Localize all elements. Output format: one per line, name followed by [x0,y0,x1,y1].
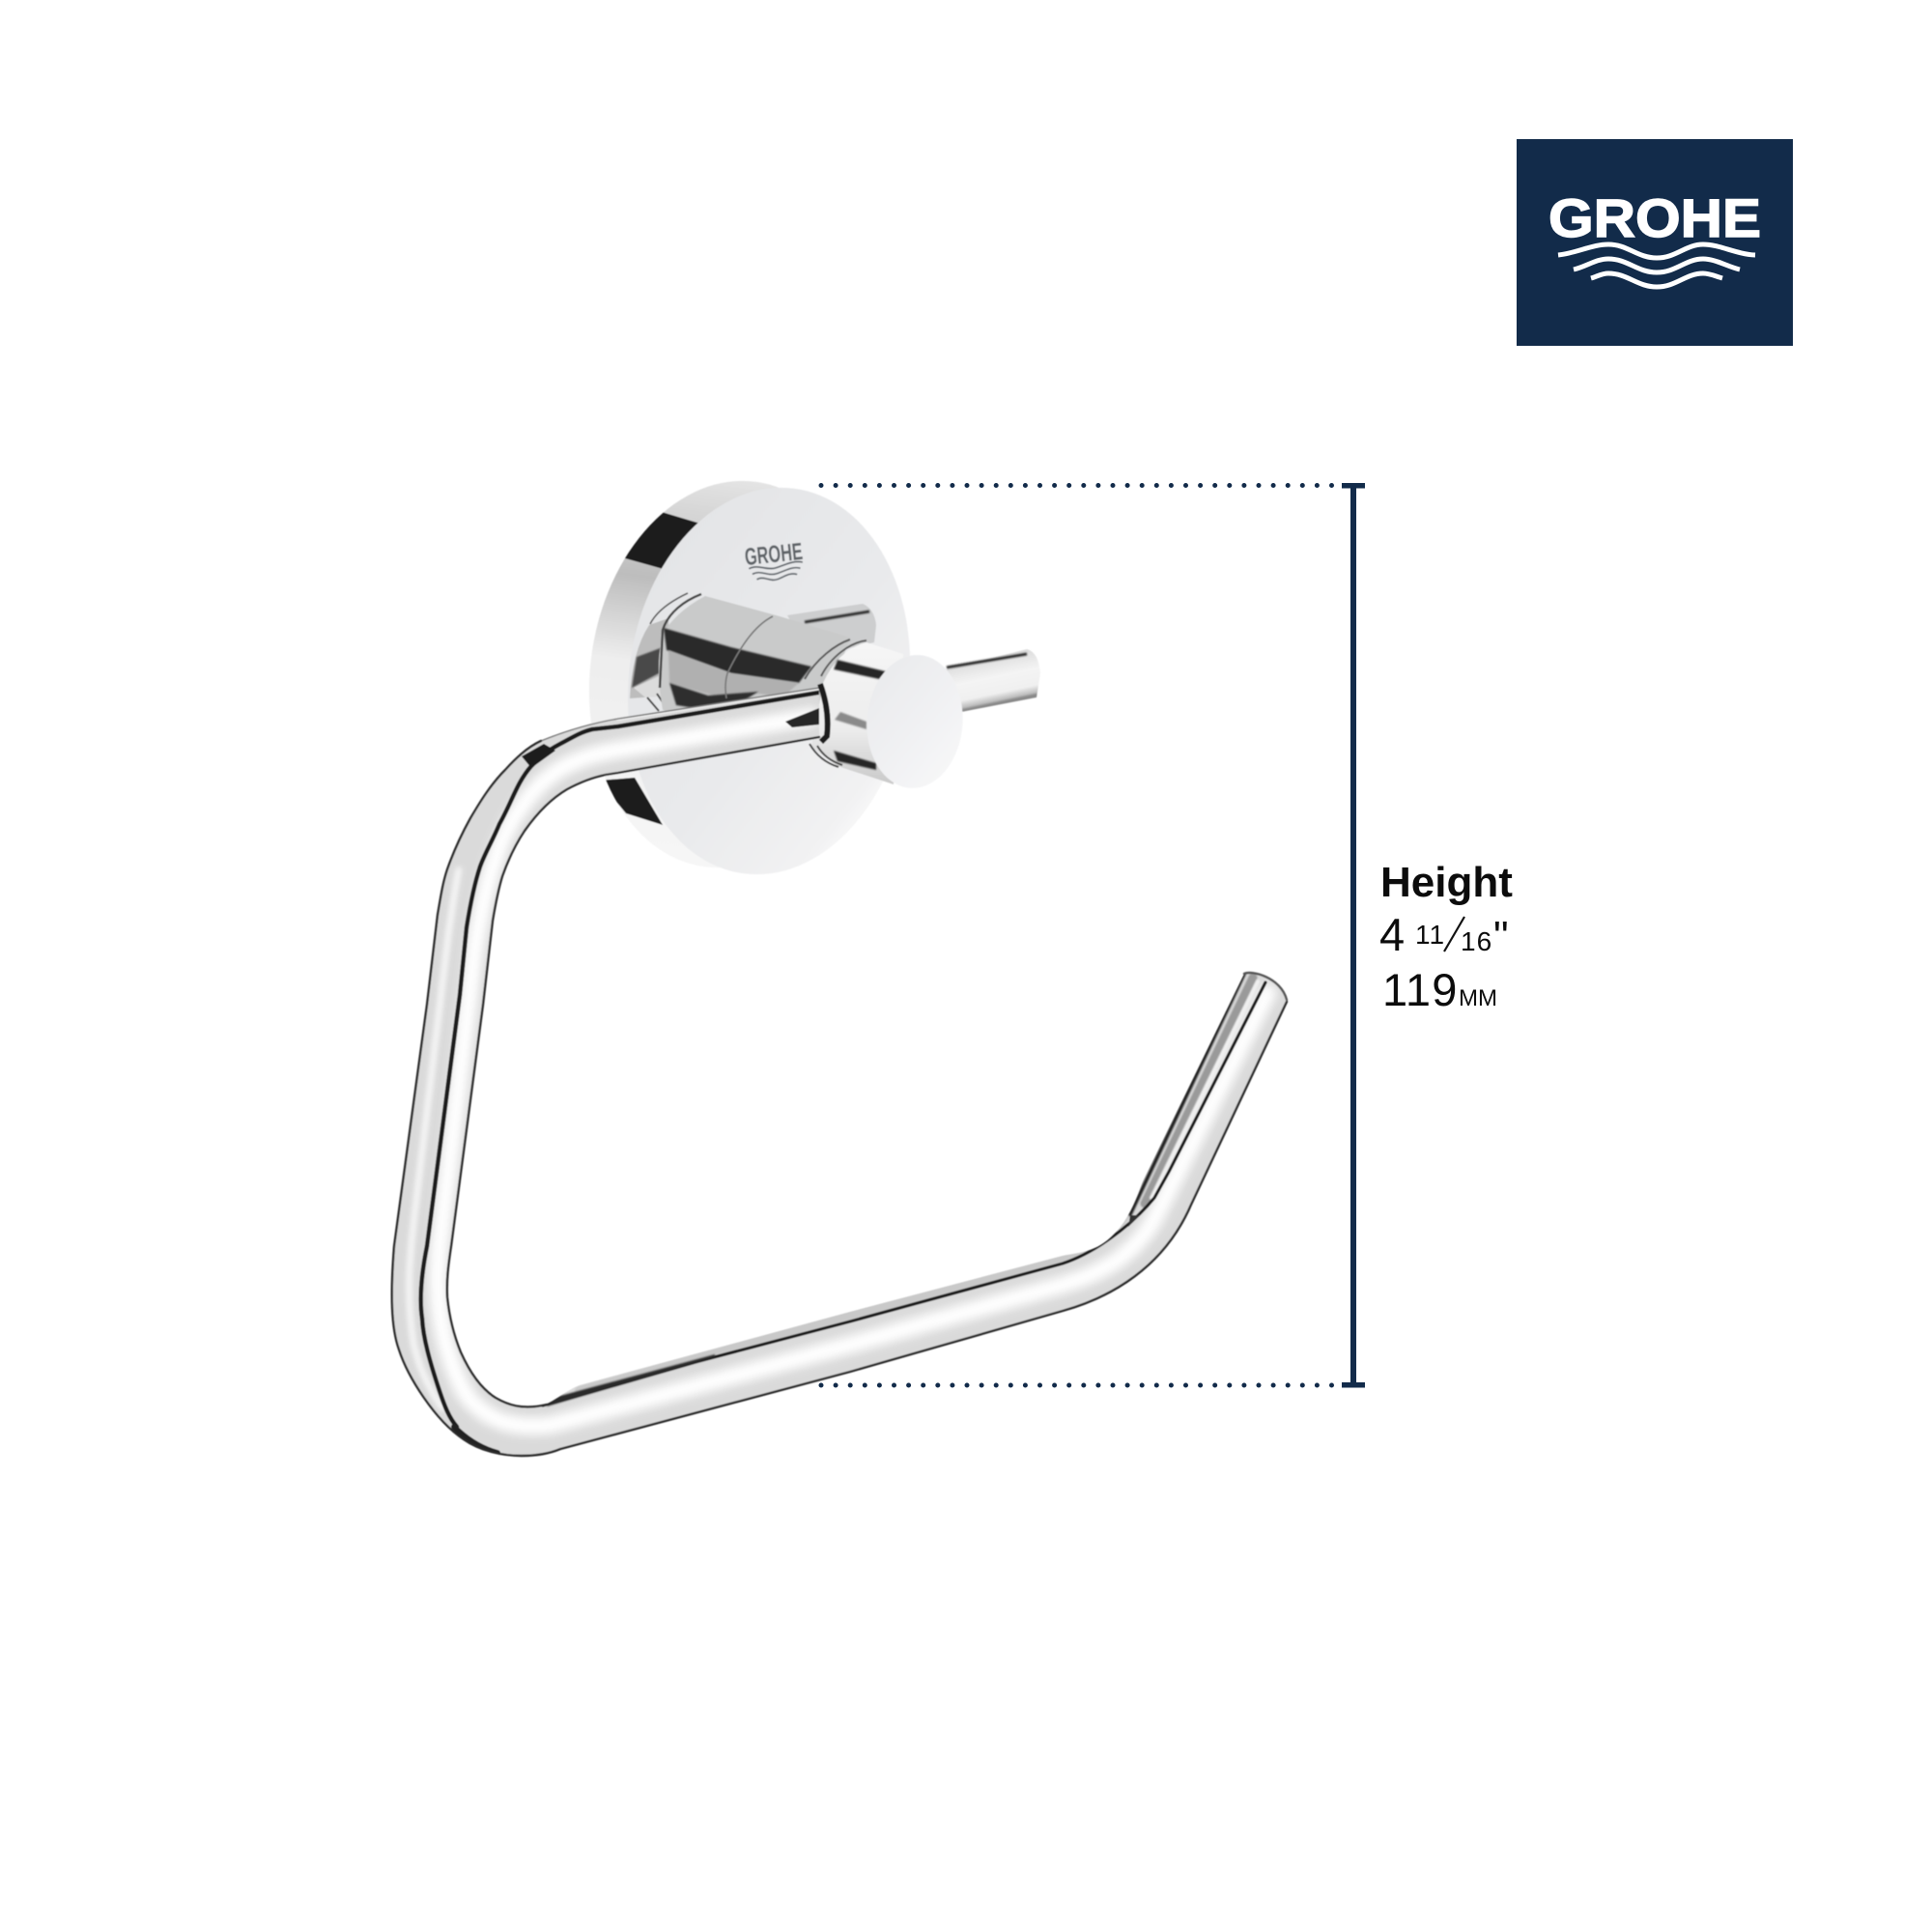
engraved rosette logo [744,538,805,582]
arm body [392,688,1287,1456]
height label: Height [1380,859,1513,906]
clamp band and wedge on arm [785,684,828,742]
outer dark line on right leg [1130,974,1244,1214]
grey top band of lower bar [580,1215,1125,1391]
outer lobe highlights [410,869,459,1408]
dark line on lower bar and right leg [543,982,1265,1406]
dotted extension bottom [821,1383,1333,1387]
dark line on left leg and arm top [421,693,818,1427]
dotted extension top [821,483,1333,488]
height label: 11 [1415,920,1445,950]
arm edge lines [392,688,1287,1456]
brand logo: GROHE [1548,187,1761,248]
chrome arm [392,686,1287,1456]
end cap [863,652,967,791]
grey strip on right leg [1145,978,1253,1204]
reflection of post on rosette face [630,618,670,711]
rear pin piece [787,604,876,657]
end pin [942,649,1040,713]
toilet paper holder product [392,464,1287,1456]
height label: 4 [1379,909,1405,960]
post cylinder [650,593,850,720]
lower lobe highlight [438,717,1267,1426]
wall rosette [589,481,910,874]
height label: MM [1459,985,1497,1011]
height label: 16 [1461,926,1492,956]
height dimension line [821,483,1365,1387]
dark patches [522,744,555,768]
brand logo [1517,139,1793,346]
height label: " [1493,913,1509,960]
arm shading [410,686,1267,1453]
height label [1379,859,1513,1015]
engraved rosette logo: GROHE [744,538,804,571]
height label: 119 [1382,964,1459,1015]
post end section [805,639,903,784]
